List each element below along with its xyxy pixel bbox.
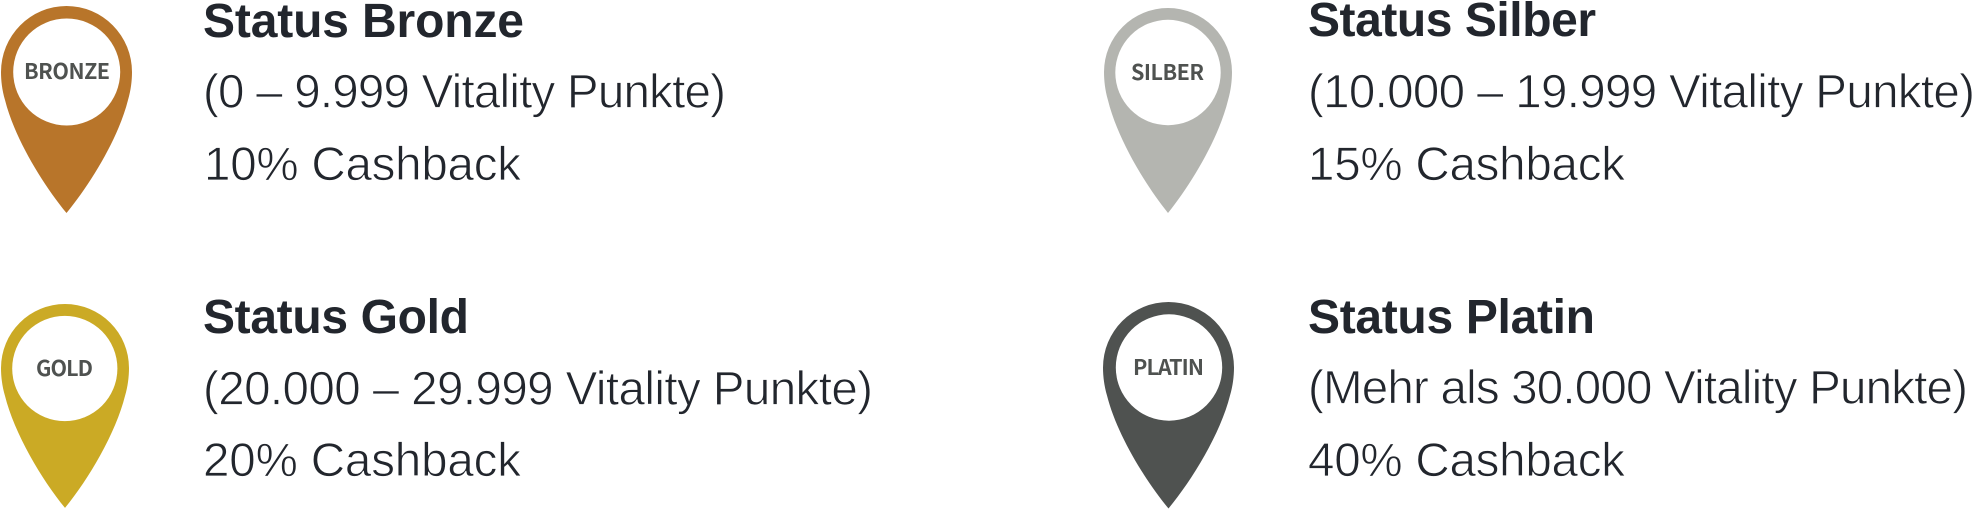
text: gold cashback: 20% Cashback bbox=[203, 434, 521, 487]
icon: silver map pin bbox=[1104, 8, 1232, 213]
heading: status gold: Status Gold bbox=[203, 291, 469, 344]
text: silber cashback: 15% Cashback bbox=[1308, 138, 1625, 191]
panel: status platin bbox=[1103, 291, 1968, 508]
text: bronze cashback: 10% Cashback bbox=[204, 138, 521, 191]
text: platin points range: (Mehr als 30.000 Vitality Punkte) bbox=[1308, 362, 1968, 414]
panel: status silber bbox=[1104, 0, 1975, 213]
panel: status bronze bbox=[1, 0, 726, 213]
text: bronze points range: (0 – 9.999 Vitality Punkte) bbox=[203, 66, 726, 118]
icon: bronze map pin bbox=[1, 6, 132, 213]
icon: platinum map pin bbox=[1103, 302, 1234, 508]
icon: gold map pin: GOLD bbox=[36, 352, 93, 383]
text: silber points range: (10.000 – 19.999 Vitality Punkte) bbox=[1308, 66, 1975, 118]
heading: status platin: Status Platin bbox=[1308, 291, 1595, 344]
text: gold points range: (20.000 – 29.999 Vitality Punkte) bbox=[203, 362, 873, 416]
icon: gold map pin bbox=[1, 304, 129, 508]
panel: status gold bbox=[1, 291, 873, 508]
icon: silver map pin: SILBER bbox=[1131, 56, 1204, 87]
icon: platinum map pin: PLATIN bbox=[1133, 351, 1204, 382]
icon: bronze map pin: BRONZE bbox=[24, 55, 110, 86]
text: platin cashback: 40% Cashback bbox=[1308, 434, 1625, 487]
